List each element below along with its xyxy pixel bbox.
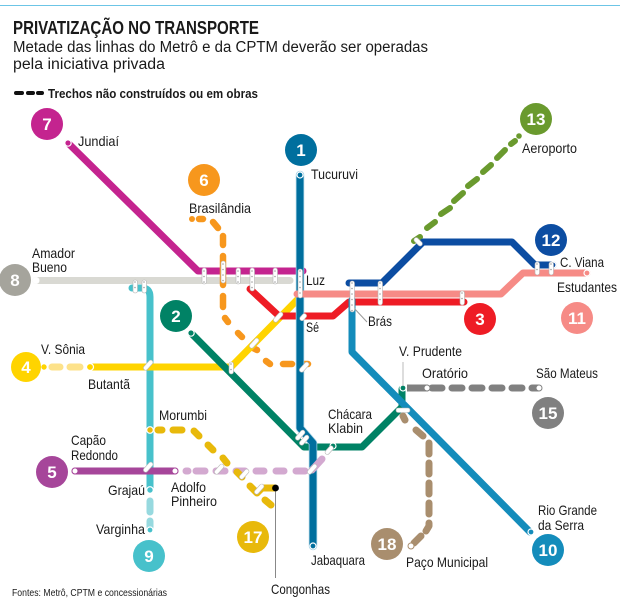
interchange connectors xyxy=(133,237,554,495)
line 11 xyxy=(297,270,590,294)
line 4 xyxy=(41,297,300,370)
badge 12: 12 xyxy=(542,231,560,250)
badge 5: 5 xyxy=(47,463,57,482)
line 7 xyxy=(65,140,303,271)
station labels: Brasilândia xyxy=(189,200,251,216)
station labels: Chácara xyxy=(328,406,372,422)
station labels: V. Prudente xyxy=(399,343,462,359)
station labels: Jabaquara xyxy=(311,552,365,568)
station labels: Klabin xyxy=(328,420,363,436)
badge 17 xyxy=(237,521,269,553)
line 6 xyxy=(189,216,308,364)
subtitle: Metade das linhas do Metrô e da CPTM deverão ser operadas xyxy=(13,39,428,56)
source note: Fontes: Metrô, CPTM e concessionárias xyxy=(12,587,167,599)
Brás leader xyxy=(353,307,367,322)
station labels: Pinheiro xyxy=(171,493,217,509)
badge 18 xyxy=(371,528,403,560)
line 15 xyxy=(407,385,542,391)
line 3 xyxy=(250,289,464,316)
badge 1 xyxy=(285,134,317,166)
line 18 xyxy=(403,416,429,549)
station labels: Adolfo xyxy=(171,479,206,495)
badge 7 xyxy=(31,108,63,140)
badge 8: 8 xyxy=(10,271,20,290)
line 8 xyxy=(32,277,290,284)
station labels: Grajaú xyxy=(108,482,145,498)
badge 6: 6 xyxy=(199,171,209,190)
station labels: Rio Grande xyxy=(538,502,597,518)
legend: dashed sections: Trechos não construídos ou em obras xyxy=(48,86,258,101)
badge 2 xyxy=(160,300,192,332)
station labels: Tucuruvi xyxy=(311,166,358,182)
badge 4: 4 xyxy=(21,358,31,377)
station labels: da Serra xyxy=(538,517,584,533)
badge 17: 17 xyxy=(244,528,262,547)
station labels: São Mateus xyxy=(536,365,598,381)
station labels: C. Viana xyxy=(560,254,604,270)
badge 10 xyxy=(532,534,564,566)
badge 9: 9 xyxy=(144,547,154,566)
line 9 xyxy=(132,288,153,533)
badge 7: 7 xyxy=(42,115,52,134)
badge 13 xyxy=(520,103,552,135)
badge 9 xyxy=(133,540,165,572)
badge 12 xyxy=(535,224,567,256)
station labels: Sé xyxy=(306,319,319,335)
line 17 xyxy=(147,427,275,505)
station labels: Butantã xyxy=(88,376,130,392)
station labels: Luz xyxy=(306,272,325,288)
line 10 xyxy=(352,300,534,535)
subtitle: pela iniciativa privada xyxy=(13,56,165,73)
station labels: Bueno xyxy=(32,259,67,275)
badge 2: 2 xyxy=(171,307,181,326)
station labels: Varginha xyxy=(96,521,145,537)
station labels: Morumbi xyxy=(159,407,207,423)
station labels: Oratório xyxy=(422,365,468,381)
badge 3 xyxy=(464,303,496,335)
badge 3: 3 xyxy=(475,310,485,329)
subtitle xyxy=(13,39,428,73)
line 1 xyxy=(297,172,316,549)
badge 18: 18 xyxy=(378,535,396,554)
station labels xyxy=(32,133,617,597)
station labels: V. Sônia xyxy=(41,341,85,357)
title: PRIVATIZAÇÃO NO TRANSPORTE xyxy=(13,17,259,38)
badge 13: 13 xyxy=(527,110,545,129)
line 2 xyxy=(188,330,406,449)
badge 11 xyxy=(561,302,593,334)
line 5 xyxy=(72,459,322,474)
badge 6 xyxy=(188,164,220,196)
badge 4 xyxy=(11,352,41,382)
line 13 xyxy=(414,133,522,241)
line 12 xyxy=(349,242,556,283)
badge 15: 15 xyxy=(539,404,557,423)
station labels: Paço Municipal xyxy=(406,554,488,570)
badge 8 xyxy=(0,264,31,296)
Congonhas leader xyxy=(272,485,279,578)
station labels: Amador xyxy=(32,245,75,261)
station labels: Jundiaí xyxy=(78,133,119,149)
badge 5 xyxy=(36,456,68,488)
badge 10: 10 xyxy=(539,541,557,560)
station labels: Redondo xyxy=(71,447,118,463)
station labels: Congonhas xyxy=(271,581,330,597)
badge 11: 11 xyxy=(568,309,586,328)
badge 15 xyxy=(532,397,564,429)
station labels: Aeroporto xyxy=(522,140,577,156)
badge 1: 1 xyxy=(296,141,306,160)
station labels: Capão xyxy=(71,432,106,448)
V. Prudente leader xyxy=(402,362,404,386)
station labels: Brás xyxy=(368,313,392,329)
